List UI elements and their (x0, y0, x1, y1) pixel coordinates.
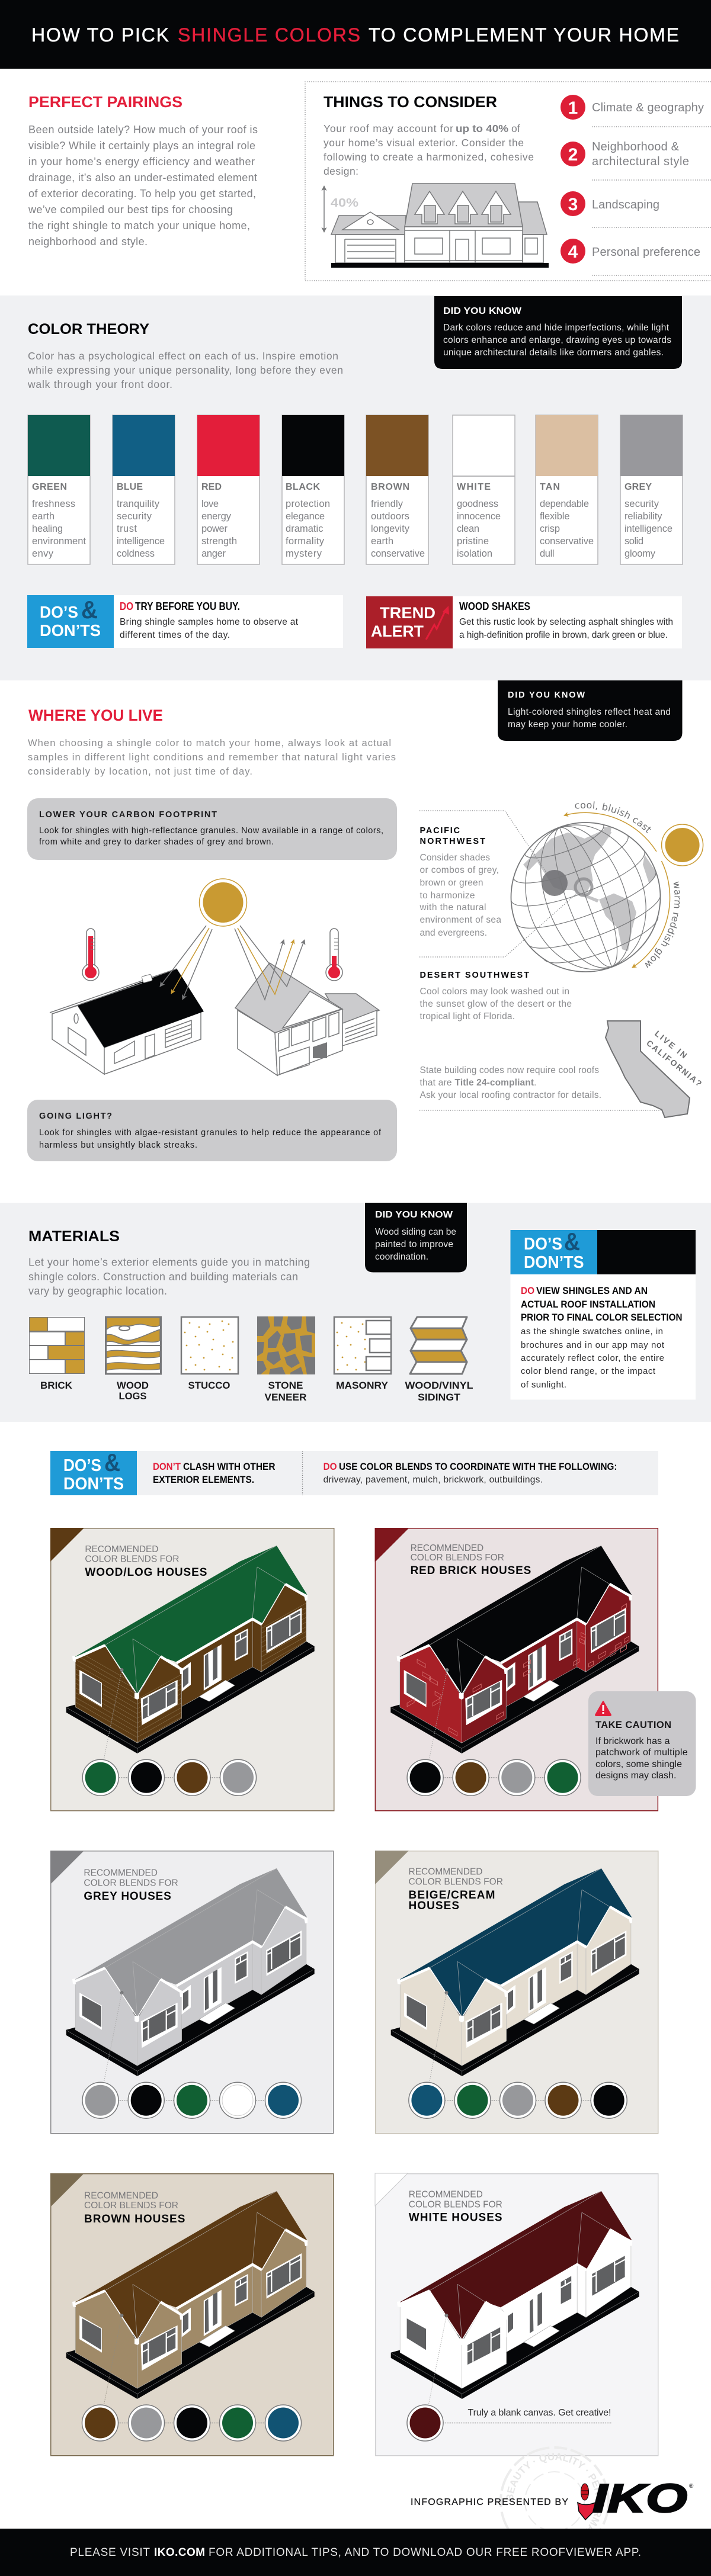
do's and don'ts tip: DO (120, 600, 133, 612)
callout: lower your carbon footprint: Look for shingles with high-reflectance granules. Now available in a range of colors, (39, 826, 383, 836)
do's and don'ts sidebar: ACTUAL ROOF INSTALLATION (521, 1299, 655, 1310)
leader line (430, 1668, 449, 1759)
trend alert tip: TREND (380, 604, 435, 622)
swatch card: grey: reliability (624, 511, 662, 522)
recommended color swatch and note: Truly a blank canvas. Get creative! (468, 2408, 611, 2418)
callout: going light: Look for shingles with algae-resistant granules to help reduce the appearance of (39, 1128, 382, 1138)
panel: perfect pairings (28, 93, 258, 248)
do's and don'ts bar: DO (324, 1461, 337, 1472)
swatch card: red: power (201, 523, 228, 534)
callout: take caution (588, 1691, 696, 1796)
card title (84, 2191, 185, 2225)
swatch card: grey: security (624, 499, 659, 509)
do's and don'ts tip: & (81, 596, 98, 624)
callout: lower your carbon footprint: LOWER YOUR CARBON FOOTPRINT (39, 810, 217, 820)
material icon: masonry: MASONRY (336, 1380, 389, 1391)
paragraph: your home’s visual exterior. Consider the (324, 137, 524, 149)
text: desert southwest: DESERT SOUTHWEST (419, 971, 529, 980)
card title: RECOMMENDED (84, 1868, 158, 1878)
card title: HOUSES (409, 1900, 459, 1912)
globe diagram (511, 801, 704, 972)
text: california building codes: Ask your local roofing contractor for details. (419, 1090, 601, 1100)
icon: warning triangle (595, 1701, 611, 1716)
swatch card: brown: friendly (371, 499, 403, 509)
swatch card: green: earth (32, 511, 55, 522)
did you know callout: may keep your home cooler. (508, 720, 627, 730)
swatch card: grey: gloomy (624, 548, 656, 559)
icon: cool thermometer (326, 929, 342, 981)
text: desert southwest (419, 894, 577, 1022)
swatch card: tan: conservative (540, 536, 594, 547)
do's and don'ts bar: & (104, 1448, 120, 1476)
did you know callout (365, 1203, 467, 1272)
arc: warm reddish glow (632, 861, 670, 968)
swatch card: green: environment (32, 536, 86, 547)
swatch card: grey (620, 415, 683, 564)
brick details (407, 1604, 629, 1736)
swatch card: brown (366, 415, 428, 564)
swatch card: brown: earth (371, 536, 393, 547)
do's and don'ts tip (27, 595, 343, 648)
IKO wordmark: IKO (592, 2476, 687, 2521)
card title: COLOR BLENDS FOR (84, 1878, 178, 1888)
swatch card: white: clean (457, 523, 479, 534)
heading: perfect pairings: PERFECT PAIRINGS (28, 93, 182, 111)
card title: RECOMMENDED (84, 2191, 158, 2201)
presented by IKO logo: ® (689, 2483, 694, 2490)
swatch card: white (453, 415, 515, 564)
swatch card: red: strength (201, 536, 237, 547)
panel: beige/cream houses (375, 1851, 658, 2134)
swatch card: blue: BLUE (117, 482, 143, 492)
light-roof house (235, 926, 379, 1075)
did you know callout: colors enhance and enlarge, drawing eyes up towards (443, 335, 671, 345)
do's and don'ts bar: USE COLOR BLENDS TO COORDINATE WITH THE FOLLOWING: (339, 1461, 617, 1472)
text: pacific northwest: and evergreens. (419, 928, 487, 938)
text: pacific northwest: brown or green (419, 878, 483, 888)
house illustration (66, 2191, 315, 2399)
swatch card: brown: BROWN (371, 482, 409, 492)
title: SHINGLE COLORS (178, 24, 360, 46)
watermark stamp: BEAUTY · QUALITY · PERFORMANCE · (506, 2453, 602, 2529)
callout: going light: harmless but unsightly black streaks. (39, 1141, 197, 1150)
material icon: wood logs (105, 1317, 161, 1402)
panel: things to consider (305, 82, 711, 281)
trend alert tip: a high-definition profile in brown, dark green or blue. (459, 630, 668, 640)
icon: hot thermometer (82, 929, 99, 981)
swatch card: tan: dull (540, 548, 555, 559)
callout: take caution: colors, some shingle (595, 1759, 682, 1769)
do's and don'ts sidebar: PRIOR TO FINAL COLOR SELECTION (521, 1312, 683, 1323)
material icon: wood or vinyl siding (405, 1317, 473, 1403)
paragraph: while expressing your unique personality, long before they even (27, 364, 343, 376)
swatch card: green: GREEN (32, 482, 67, 492)
do's and don'ts sidebar: & (564, 1228, 580, 1255)
paragraph: Your roof may account for (324, 123, 453, 134)
do's and don'ts bar (50, 1448, 658, 1495)
swatch card: black: elegance (286, 511, 325, 522)
footer text: IKO.COM (154, 2546, 205, 2559)
do's and don'ts sidebar: brochures and in our app may not (521, 1340, 665, 1350)
callout: take caution: designs may clash. (595, 1771, 676, 1781)
panel: color theory (0, 295, 711, 680)
callout: going light (27, 1100, 397, 1161)
panel: red brick houses (375, 1528, 658, 1811)
card title: WHITE HOUSES (409, 2211, 502, 2224)
header banner (0, 0, 711, 69)
did you know callout: DID YOU KNOW (375, 1210, 453, 1220)
watermark stamp (499, 2446, 610, 2529)
callout: going light: GOING LIGHT? (39, 1112, 112, 1121)
text: pacific northwest (419, 811, 546, 938)
icon: rising arrow (426, 606, 449, 640)
panel: grey houses (50, 1851, 334, 2134)
intro text: visible? While it certainly plays an integral role (28, 140, 255, 152)
did you know callout (498, 680, 683, 741)
card title: RECOMMENDED (409, 2190, 483, 2200)
recommended color swatches (82, 2082, 301, 2118)
swatch card: white: isolation (457, 548, 492, 559)
swatch card: brown: longevity (371, 523, 410, 534)
intro text: Been outside lately? How much of your roof is (28, 124, 258, 136)
leader line (429, 2314, 448, 2404)
do's and don'ts sidebar: DON’TS (524, 1253, 584, 1272)
did you know callout (434, 296, 682, 369)
swatch card: white: WHITE (457, 482, 491, 492)
recommended color swatches (409, 2082, 627, 2118)
globe grid (490, 802, 681, 993)
card title: COLOR BLENDS FOR (409, 1877, 503, 1887)
card title: RED BRICK HOUSES (411, 1565, 531, 1577)
did you know callout: DID YOU KNOW (508, 690, 585, 700)
house illustration (66, 1546, 315, 1753)
panel: where you live (27, 680, 704, 1161)
callout: take caution: TAKE CAUTION (595, 1720, 671, 1730)
do's and don'ts tip: DON’TS (40, 621, 101, 640)
title (31, 24, 679, 46)
swatch card: green: freshness (32, 499, 75, 509)
intro text: the right shingle to match your unique home, (28, 220, 250, 232)
presented by IKO logo: INFOGRAPHIC PRESENTED BY (411, 2497, 568, 2507)
swatch card: blue (113, 415, 175, 564)
did you know callout: Light-colored shingles reflect heat and (508, 707, 671, 717)
title: HOW TO PICK (31, 24, 169, 46)
swatch card: grey: intelligence (624, 523, 672, 534)
illustration: sun reflecting on dark and light roofs (50, 879, 379, 1075)
do's and don'ts tip: Bring shingle samples home to observe at (120, 617, 299, 627)
do's and don'ts bar: EXTERIOR ELEMENTS. (153, 1474, 254, 1485)
do's and don'ts bar: driveway, pavement, mulch, brickwork, outbuildings. (324, 1475, 543, 1485)
material icon: brick: BRICK (40, 1380, 73, 1391)
numbered list: factors: 3 (568, 195, 578, 214)
do's and don'ts sidebar: color blend range, or the impact (521, 1366, 656, 1376)
intro text: of exterior decorating. To help you get started, (28, 188, 256, 200)
paragraph: Let your home’s exterior elements guide you in matching (28, 1257, 310, 1268)
text: pacific northwest: Consider shades (419, 853, 490, 863)
swatch card: black: mystery (286, 548, 322, 559)
material icon: wood or vinyl siding: WOOD/VINYL (405, 1380, 473, 1391)
swatch card: tan: flexible (540, 511, 570, 522)
title: TO COMPLEMENT YOUR HOME (369, 24, 679, 46)
text: california building codes: Title 24-compliant (455, 1078, 534, 1088)
swatch card: red: anger (201, 548, 226, 559)
swatch card: black: BLACK (286, 482, 320, 492)
do's and don'ts bar: DO’S (63, 1456, 101, 1475)
paragraph: vary by geographic location. (28, 1285, 167, 1297)
panel: white houses (375, 2173, 658, 2456)
do's and don'ts bar: DON’T (153, 1461, 181, 1472)
text: desert southwest: tropical light of Florida. (419, 1011, 515, 1022)
leader line (104, 2314, 123, 2404)
card title: COLOR BLENDS FOR (409, 2199, 502, 2209)
swatch card: blue: intelligence (117, 536, 165, 547)
swatch card: black: formality (286, 536, 325, 547)
card title: WOOD/LOG HOUSES (85, 1566, 207, 1579)
intro text: in your home’s energy efficiency and weather (28, 156, 255, 168)
panel: brown houses (50, 2173, 334, 2456)
intro text: neighborhood and style. (28, 236, 148, 248)
swatch card: red: RED (201, 482, 222, 492)
paragraph: design: (324, 165, 358, 177)
card title: GREY HOUSES (84, 1890, 171, 1903)
card title: COLOR BLENDS FOR (411, 1553, 504, 1563)
swatch card: black: dramatic (286, 523, 324, 534)
did you know callout: Wood siding can be (375, 1227, 456, 1237)
footer text: FOR ADDITIONAL TIPS, AND TO DOWNLOAD OUR FREE ROOFVIEWER APP. (209, 2546, 641, 2559)
card title (85, 1544, 207, 1579)
continents (523, 827, 658, 951)
card title: RECOMMENDED (85, 1544, 158, 1554)
intro text: drainage, it’s also an under-estimated element (28, 172, 257, 184)
do's and don'ts tip: different times of the day. (120, 630, 230, 640)
paragraph (324, 123, 534, 177)
paragraph: When choosing a shingle color to match your home, always look at actual (28, 738, 391, 749)
numbered list: factors: Climate & geography (592, 101, 704, 114)
paragraph: samples in different light conditions and remember that natural light varies (28, 752, 396, 763)
icon: IKO shield (578, 2484, 595, 2520)
material icon: stucco (181, 1317, 238, 1391)
did you know callout: Dark colors reduce and hide imperfections, while light (443, 323, 670, 333)
numbered list: factors: 1 (568, 98, 578, 118)
callout: lower your carbon footprint (27, 798, 397, 860)
swatch card: tan: crisp (540, 523, 560, 534)
recommended color swatches (82, 1759, 256, 1796)
panel: materials (0, 1203, 711, 1422)
swatch card: green: healing (32, 523, 63, 534)
numbered list: factors: 4 (568, 242, 578, 262)
did you know callout: painted to improve (375, 1239, 453, 1250)
recommended color swatches (82, 2405, 301, 2441)
numbered list: factors: Landscaping (592, 198, 659, 211)
paragraph (28, 1257, 310, 1297)
dark-roof house (50, 926, 212, 1074)
text: pacific northwest: to harmonize (419, 891, 475, 901)
heading: color theory: COLOR THEORY (28, 321, 149, 338)
do's and don'ts sidebar: VIEW SHINGLES AND AN (536, 1285, 648, 1296)
material icon: masonry (334, 1317, 391, 1391)
heading: where you live: WHERE YOU LIVE (28, 706, 163, 724)
house illustration (391, 2191, 639, 2399)
text: desert southwest: the sunset glow of the desert or the (419, 999, 572, 1009)
house illustration with 40% roof measure (324, 184, 549, 268)
card title: RECOMMENDED (411, 1543, 483, 1553)
card title: COLOR BLENDS FOR (84, 2201, 178, 2211)
swatch card: blue: coldness (117, 548, 155, 559)
did you know callout: coordination. (375, 1252, 428, 1262)
paragraph (28, 738, 396, 777)
text: california building codes: . (534, 1078, 536, 1088)
paragraph: following to create a harmonized, cohesive (324, 151, 534, 163)
paragraph (27, 350, 343, 390)
panel: wood/log houses (50, 1528, 334, 1811)
swatch card: white: goodness (457, 499, 498, 509)
callout: lower your carbon footprint: from white and grey to darker shades of grey and brown. (39, 837, 274, 847)
house illustration (390, 1546, 639, 1753)
paragraph: walk through your front door. (27, 378, 172, 390)
card title (84, 1868, 178, 1903)
trend alert tip: Get this rustic look by selecting asphalt shingles with (459, 617, 673, 627)
swatch card: brown: outdoors (371, 511, 409, 522)
material icon: wood logs: LOGS (118, 1390, 147, 1402)
text: pacific northwest: or combos of grey, (419, 865, 499, 875)
swatch card: black (282, 415, 344, 564)
swatch card: red: love (201, 499, 219, 509)
material icon: brick (29, 1317, 85, 1391)
paragraph: up to 40% (456, 123, 508, 134)
swatch card: blue: security (117, 511, 152, 522)
swatch card: tan: TAN (540, 482, 560, 492)
map: california: CALIFORNIA? (645, 1038, 704, 1088)
card title: COLOR BLENDS FOR (85, 1554, 179, 1565)
swatch card: blue: trust (117, 523, 137, 534)
map: california: LIVE IN (653, 1029, 689, 1060)
intro text: we’ve compiled our best tips for choosing (28, 204, 233, 216)
do's and don'ts bar: DON’TS (63, 1475, 124, 1493)
numbered list: factors (561, 95, 711, 275)
paragraph: shingle colors. Construction and building materials can (28, 1271, 298, 1283)
house illustration (66, 1868, 315, 2076)
leader line (104, 1991, 123, 2082)
card title (409, 2190, 502, 2224)
recommended color swatches (407, 1759, 581, 1796)
numbered list: factors: 2 (568, 145, 578, 165)
swatch card: blue: tranquility (117, 499, 160, 509)
numbered list: factors: Personal preference (592, 246, 700, 259)
heading: materials: MATERIALS (28, 1228, 120, 1245)
trend alert tip (366, 596, 682, 648)
paragraph: Color has a psychological effect on each of us. Inspire emotion (28, 350, 338, 362)
paragraph: considerably by location, not just time of day. (28, 766, 252, 777)
material icon: stucco: STUCCO (188, 1380, 230, 1391)
card title (409, 1867, 503, 1912)
label: warm reddish glow: warm reddish glow (645, 881, 680, 968)
text: california building codes: that are (419, 1078, 451, 1088)
footer text: PLEASE VISIT (70, 2546, 150, 2559)
do's and don'ts sidebar: as the shingle swatches online, in (521, 1326, 663, 1337)
swatch card: white: pristine (457, 536, 489, 547)
numbered list: factors: Neighborhood & (592, 140, 680, 153)
text: california building codes: State building codes now require cool roofs (419, 1065, 599, 1075)
do's and don'ts tip: TRY BEFORE YOU BUY. (135, 600, 240, 612)
swatch card: tan: dependable (540, 499, 589, 509)
do's and don'ts sidebar (511, 1228, 696, 1400)
material icon: wood logs: WOOD (117, 1380, 149, 1391)
swatch card: grey: GREY (624, 482, 652, 492)
swatch card: tan (536, 415, 598, 564)
card title: BEIGE/CREAM (409, 1889, 495, 1902)
arc: cool, bluish cast (564, 812, 656, 852)
swatch card: red (197, 415, 260, 564)
icon: sun (662, 824, 703, 866)
swatch card: green: envy (32, 548, 54, 559)
swatch card: black: protection (286, 499, 330, 509)
text: pacific northwest: NORTHWEST (419, 837, 485, 846)
text: desert southwest: Cool colors may look washed out in (419, 987, 569, 997)
label: cool, bluish cast: cool, bluish cast (575, 801, 651, 834)
house illustration (391, 1868, 639, 2076)
swatch card: brown: conservative (371, 548, 425, 559)
text: pacific northwest: with the natural (419, 902, 486, 913)
swatch card: red: energy (201, 511, 232, 522)
callout: take caution: patchwork of multiple (595, 1748, 688, 1758)
map: california (606, 1021, 704, 1117)
callout: take caution: If brickwork has a (595, 1736, 670, 1746)
do's and don'ts sidebar: DO’S (524, 1235, 562, 1254)
do's and don'ts tip: DO’S (40, 603, 78, 621)
do's and don'ts sidebar: of sunlight. (521, 1380, 566, 1390)
trend alert tip: ALERT (371, 622, 424, 640)
do's and don'ts bar: CLASH WITH OTHER (183, 1461, 275, 1472)
text: pacific northwest: environment of sea (419, 915, 501, 925)
recommended color swatch and note (407, 2405, 611, 2441)
swatch card: grey: solid (624, 536, 643, 547)
card title (411, 1543, 531, 1577)
do's and don'ts sidebar: accurately reflect color, the entire (521, 1353, 664, 1363)
presented by IKO logo (411, 2476, 694, 2521)
paragraph: of (511, 123, 520, 134)
did you know callout: unique architectural details like dormers and gables. (443, 348, 664, 358)
leader line (104, 1668, 123, 1759)
swatch card: green (28, 415, 90, 564)
swatch card: white: innocence (457, 511, 501, 522)
material icon: wood or vinyl siding: SIDINGT (418, 1392, 461, 1403)
icon: sun (199, 879, 246, 926)
text: pacific northwest: PACIFIC (419, 826, 460, 836)
trend alert tip: WOOD SHAKES (459, 600, 530, 612)
text: california building codes (419, 1065, 675, 1110)
material icon: stone veneer: VENEER (264, 1392, 307, 1403)
card title: BROWN HOUSES (84, 2213, 185, 2225)
card title: RECOMMENDED (409, 1867, 482, 1877)
do's and don'ts sidebar: DO (521, 1285, 534, 1296)
material icon: stone veneer: STONE (268, 1380, 303, 1391)
footer banner (0, 2529, 711, 2576)
intro text (28, 124, 258, 248)
material icon: stone veneer (257, 1316, 315, 1403)
did you know callout: DID YOU KNOW (443, 306, 522, 316)
leader line (430, 1991, 448, 2082)
heading: things to consider: THINGS TO CONSIDER (324, 93, 497, 111)
numbered list: factors: architectural style (592, 155, 689, 168)
house illustration with 40% roof measure: 40% (331, 197, 358, 210)
